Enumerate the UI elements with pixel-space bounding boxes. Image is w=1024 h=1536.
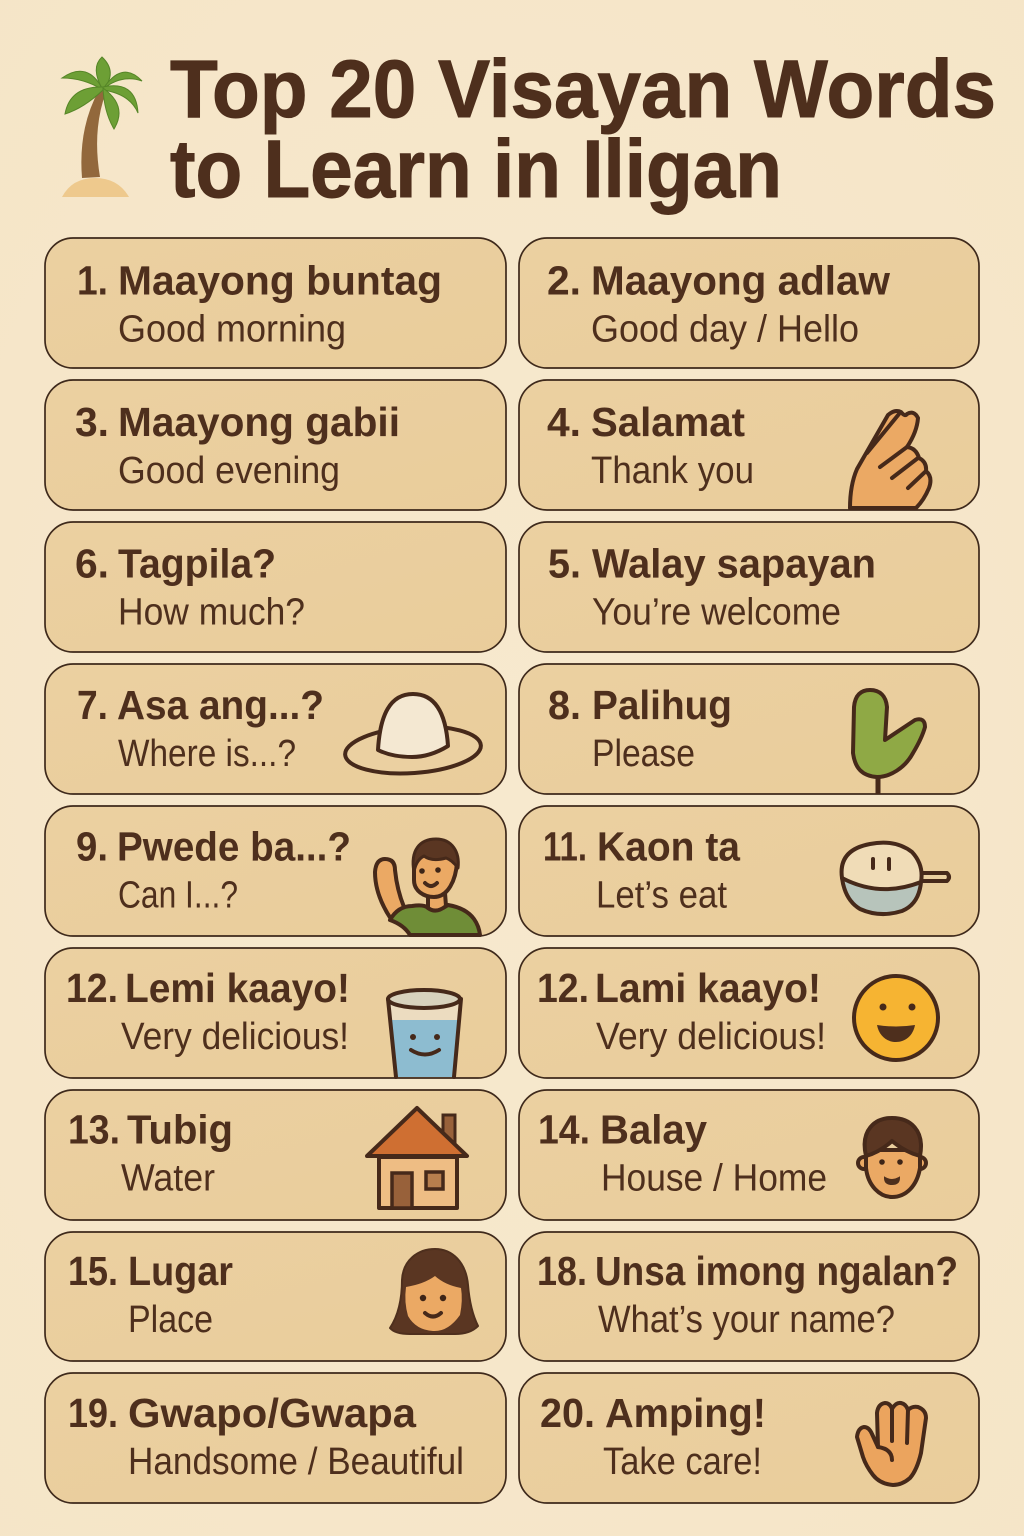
icon: raised hand — [857, 1403, 926, 1485]
card 6: Tagpila?: How much? — [118, 592, 305, 634]
title: to Learn in Iligan — [170, 124, 782, 215]
icon: boy face — [858, 1118, 926, 1197]
icon: girl face — [390, 1249, 478, 1334]
card 14: Balay — [519, 1090, 979, 1220]
card 1: Maayong buntag: Good morning — [118, 308, 346, 350]
card 15: Lugar: Place — [128, 1299, 213, 1341]
card 2: Maayong adlaw — [519, 238, 979, 368]
card 19: Gwapo/Gwapa: Handsome / Beautiful — [128, 1441, 464, 1483]
card 13: Tubig — [45, 1090, 506, 1220]
icon: finger heart hand — [850, 411, 930, 508]
card 2: Maayong adlaw: Maayong adlaw — [591, 258, 890, 304]
card 14: Balay: House / Home — [601, 1158, 827, 1200]
card 1: Maayong buntag — [45, 238, 506, 368]
card 20: Amping: 20. — [540, 1390, 595, 1436]
card 12: Lemi kaayo: Very delicious! — [121, 1016, 349, 1058]
title: Top 20 Visayan Words — [170, 44, 996, 135]
card 2: Maayong adlaw: Good day / Hello — [591, 308, 859, 350]
card 4: Salamat: Thank you — [591, 450, 754, 492]
card 5: Walay sapayan — [519, 522, 979, 652]
card 19: Gwapo/Gwapa — [45, 1373, 506, 1503]
card 18: Unsa imong ngalan: What’s your name? — [598, 1299, 895, 1341]
card 12: Lami kaayo — [519, 948, 979, 1078]
card 19: Gwapo/Gwapa: Gwapo/Gwapa — [128, 1390, 417, 1436]
card 1: Maayong buntag: Maayong buntag — [118, 258, 442, 304]
card 20: Amping: Amping! — [605, 1390, 766, 1436]
card 9: Pwede ba — [45, 806, 506, 936]
title — [170, 44, 996, 215]
icon: smiley face — [854, 976, 938, 1060]
card 15: Lugar — [45, 1232, 506, 1361]
card 13: Tubig: Water — [121, 1158, 215, 1200]
card 5: Walay sapayan: 5. — [548, 540, 581, 586]
card 4: Salamat — [519, 380, 979, 510]
card 18: Unsa imong ngalan: Unsa imong ngalan? — [595, 1248, 958, 1294]
card 6: Tagpila?: Tagpila? — [118, 540, 276, 586]
card 8: Palihug: Please — [592, 733, 695, 775]
card 8: Palihug: Palihug — [592, 682, 732, 728]
card 7: Asa ang — [45, 664, 506, 794]
card 12: Lemi kaayo: Lemi kaayo! — [125, 965, 350, 1011]
card 12: Lami kaayo: Very delicious! — [596, 1016, 826, 1058]
card 11: Kaon ta: Let’s eat — [596, 874, 727, 916]
card 3: Maayong gabii: 3. — [75, 399, 109, 445]
card 7: Asa ang: Asa ang...? — [117, 682, 324, 728]
card 4: Salamat: Salamat — [591, 399, 745, 445]
card 12: Lami kaayo: 12. — [537, 965, 589, 1011]
card 14: Balay: Balay — [600, 1106, 707, 1152]
card 9: Pwede ba: Can I...? — [118, 874, 238, 916]
card 19: Gwapo/Gwapa: 19. — [68, 1390, 118, 1436]
icon: rice pan — [842, 843, 949, 914]
card 12: Lemi kaayo — [45, 948, 506, 1078]
card 5: Walay sapayan: You’re welcome — [592, 592, 841, 634]
card 15: Lugar: Lugar — [128, 1248, 233, 1294]
card 12: Lami kaayo: Lami kaayo! — [595, 965, 821, 1011]
card 6: Tagpila?: 6. — [75, 540, 109, 586]
icon: waving person — [375, 839, 480, 935]
icon: glass of water — [388, 990, 461, 1077]
card 3: Maayong gabii: Maayong gabii — [118, 399, 400, 445]
card 8: Palihug: 8. — [548, 682, 581, 728]
card 4: Salamat: 4. — [547, 399, 581, 445]
card 12: Lemi kaayo: 12. — [66, 965, 118, 1011]
card 13: Tubig: 13. — [68, 1106, 120, 1152]
card 20: Amping — [519, 1373, 979, 1503]
card 18: Unsa imong ngalan — [519, 1232, 979, 1361]
card 8: Palihug — [519, 664, 979, 794]
card 20: Amping: Take care! — [603, 1441, 762, 1483]
card 2: Maayong adlaw: 2. — [547, 258, 581, 304]
card 9: Pwede ba: Pwede ba...? — [117, 824, 351, 870]
card 11: Kaon ta — [519, 806, 979, 936]
card 5: Walay sapayan: Walay sapayan — [592, 540, 876, 586]
card 13: Tubig: Tubig — [127, 1106, 233, 1152]
card 11: Kaon ta: 11. — [543, 824, 587, 870]
card 1: Maayong buntag: 1. — [77, 258, 108, 304]
card 3: Maayong gabii — [45, 380, 506, 510]
icon: green plant — [853, 690, 925, 794]
icon: house — [367, 1108, 467, 1208]
card 7: Asa ang: 7. — [77, 682, 108, 728]
card 6: Tagpila? — [45, 522, 506, 652]
icon: sun hat — [344, 694, 482, 778]
card 7: Asa ang: Where is...? — [118, 733, 296, 775]
card 3: Maayong gabii: Good evening — [118, 450, 340, 492]
card 18: Unsa imong ngalan: 18. — [537, 1248, 587, 1294]
card 15: Lugar: 15. — [68, 1248, 118, 1294]
card 14: Balay: 14. — [538, 1106, 590, 1152]
icon: palm tree — [62, 57, 142, 197]
card 9: Pwede ba: 9. — [76, 824, 108, 870]
card 11: Kaon ta: Kaon ta — [597, 824, 741, 870]
